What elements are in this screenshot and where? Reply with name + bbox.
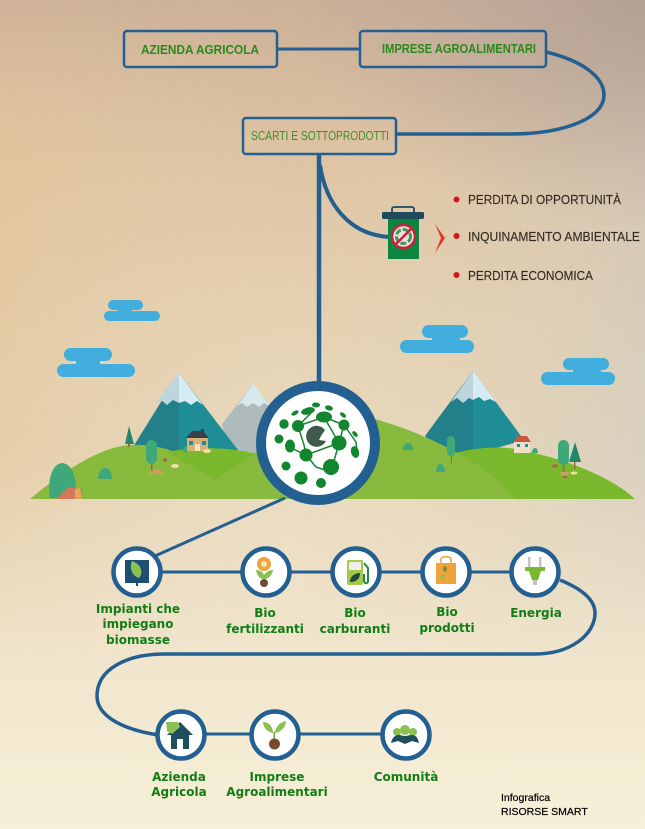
node: comunità <box>374 712 438 784</box>
box: scarti e sottoprodotti: SCARTI E SOTTOPRODOTTI <box>251 129 389 143</box>
network core <box>306 426 326 447</box>
network badge <box>261 386 375 500</box>
label: comunità: Comunità <box>374 770 438 784</box>
label: imprese agroalimentari: Agroalimentari <box>226 785 328 799</box>
branch connector to bin <box>320 165 390 237</box>
connector: azienda to imprese <box>277 48 360 50</box>
label: imprese agroalimentari: Imprese <box>250 770 304 784</box>
mountain: teal right <box>425 371 524 455</box>
trees and house right <box>403 436 581 478</box>
list: consequences <box>454 192 640 283</box>
label: azienda agricola: Agricola <box>151 785 207 799</box>
main vertical connector <box>317 154 321 385</box>
node: bio fertilizzanti <box>226 548 304 636</box>
trees and bushes left <box>49 426 179 499</box>
connector: first row line <box>160 570 515 574</box>
connector: imprese curve to scarti <box>396 52 604 134</box>
node: bio prodotti <box>419 548 475 635</box>
network links <box>289 413 357 472</box>
label: impianti: impiegano <box>103 617 173 631</box>
connector: serpentine to second row <box>97 580 595 735</box>
box: azienda agricola: AZIENDA AGRICOLA <box>141 42 260 57</box>
hill: centre diamond <box>167 448 255 480</box>
clouds <box>57 300 615 385</box>
label: bio fertilizzanti: fertilizzanti <box>226 622 304 636</box>
node: energia <box>510 548 562 620</box>
label: bio fertilizzanti: Bio <box>254 606 276 620</box>
label: energia: Energia <box>510 606 562 620</box>
box: imprese agroalimentari: IMPRESE AGROALIMENTARI <box>382 41 536 56</box>
label: bio prodotti: prodotti <box>419 621 475 635</box>
box: imprese agroalimentari <box>360 31 546 67</box>
credit: Infografica <box>501 792 550 804</box>
credit: RISORSE SMART <box>501 806 588 818</box>
node: azienda agricola <box>151 712 207 799</box>
mountain: grey <box>222 384 300 465</box>
network nodes <box>274 402 360 488</box>
node: bio carburanti <box>320 548 390 636</box>
icon: waste bin <box>382 207 424 259</box>
icon: red chevron <box>435 224 445 253</box>
box: scarti e sottoprodotti <box>243 118 396 154</box>
list: consequences: PERDITA DI OPPORTUNITÀ <box>468 192 621 207</box>
label: impianti: biomasse <box>106 633 170 647</box>
house left <box>183 429 211 453</box>
connector: network to impianti <box>155 498 285 556</box>
mountain: teal left <box>133 373 238 470</box>
box: azienda agricola <box>124 31 277 67</box>
node: imprese agroalimentari <box>226 712 328 799</box>
connector: second row line <box>200 732 385 736</box>
label: bio prodotti: Bio <box>436 605 458 619</box>
label: bio carburanti: Bio <box>344 606 366 620</box>
label: impianti: Impianti che <box>96 602 180 616</box>
list: consequences: PERDITA ECONOMICA <box>468 268 593 283</box>
hill: main <box>30 419 515 499</box>
label: bio carburanti: carburanti <box>320 622 390 636</box>
hill: right back <box>455 448 635 499</box>
label: azienda agricola: Azienda <box>152 770 206 784</box>
landscape <box>30 371 635 499</box>
node: impianti <box>96 548 180 647</box>
